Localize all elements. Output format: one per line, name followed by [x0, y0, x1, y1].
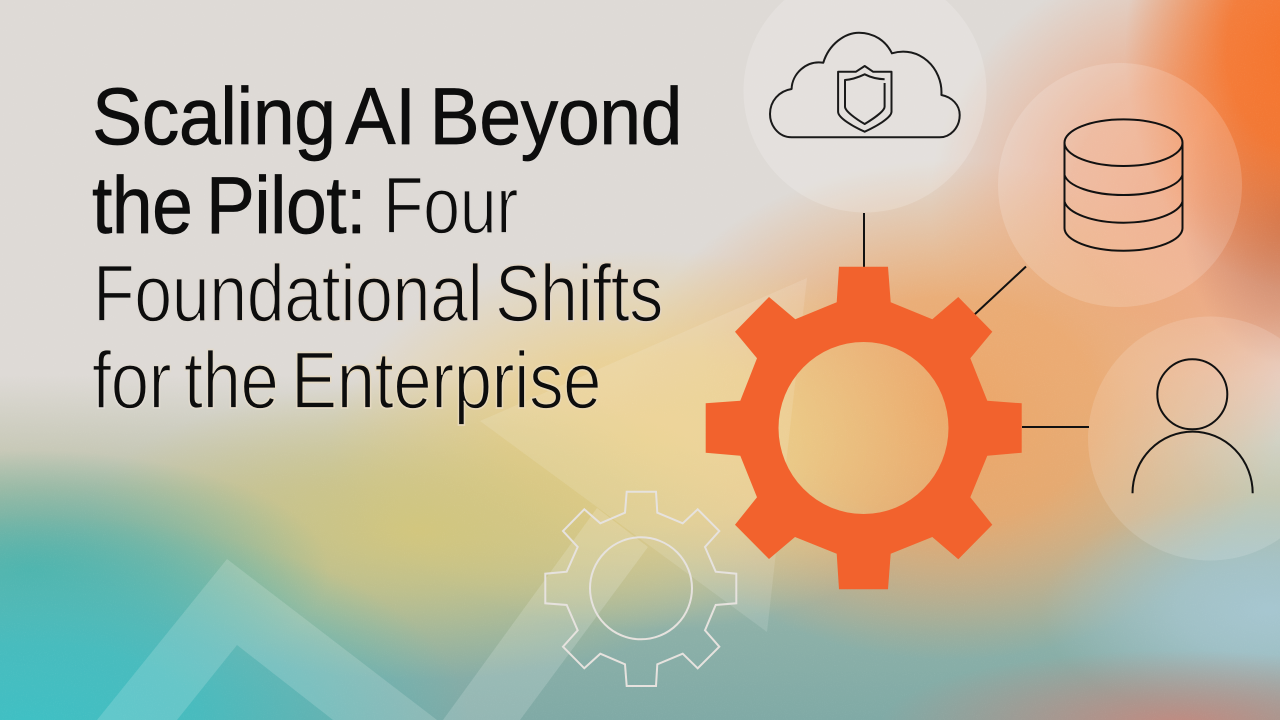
title: Scaling AI Beyond: [92, 72, 682, 162]
translucent band: centre left: [443, 508, 648, 720]
title: for the Enterprise: [92, 336, 601, 426]
title: Foundational Shifts: [93, 249, 663, 339]
icon: outlined gear: [545, 492, 736, 686]
panel: cloud circle: [744, 0, 986, 212]
translucent chevron: bottom left: [97, 559, 437, 720]
connector: database to gear: [974, 266, 1026, 315]
connector: person to gear: [1022, 426, 1089, 428]
translucent triangle: centre: [480, 278, 807, 632]
icon: database: [1064, 119, 1182, 251]
connector: cloud to gear: [863, 213, 865, 267]
panel: database circle: [998, 63, 1242, 307]
title: the Pilot:: [92, 161, 366, 251]
icon: person: [1132, 359, 1253, 493]
icon: large orange gear: [706, 267, 1022, 589]
title: [92, 72, 682, 426]
panel: person circle: [1088, 316, 1280, 560]
title: Four: [383, 161, 518, 251]
icon: cloud with shield: [770, 33, 960, 137]
